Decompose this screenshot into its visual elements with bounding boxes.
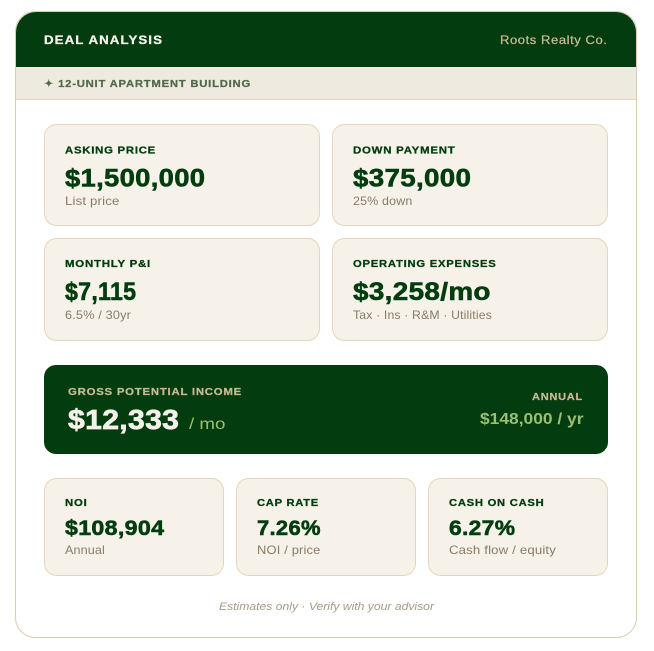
panel: down payment: $375,000 <box>353 164 471 192</box>
annual label: ANNUAL <box>532 392 583 403</box>
subtitle band <box>16 67 636 100</box>
panel: operating expenses: OPERATING EXPENSES <box>353 259 496 270</box>
panel: down payment: DOWN PAYMENT <box>353 146 456 156</box>
panel: cash on cash: 6.27% <box>449 517 515 540</box>
panel: cash on cash: CASH ON CASH <box>449 498 544 509</box>
panel: down payment: 25% down <box>353 194 412 208</box>
per month: / mo <box>189 416 226 433</box>
panel: operating expenses <box>332 238 608 340</box>
panel: NOI: NOI <box>65 498 88 509</box>
panel: down payment <box>332 124 608 226</box>
panel: NOI <box>44 478 224 576</box>
company name: Roots Realty Co. <box>500 34 608 47</box>
income label: GROSS POTENTIAL INCOME <box>68 387 242 398</box>
panel: monthly P&I: 6.5% / 30yr <box>65 308 131 322</box>
panel: asking price: $1,500,000 <box>65 164 205 192</box>
header bar <box>16 12 636 67</box>
panel: cash on cash <box>428 478 608 576</box>
panel: monthly P&I: $7,115 <box>65 278 136 306</box>
footer note: Estimates only · Verify with your advisor <box>219 601 435 613</box>
panel: operating expenses: $3,258/mo <box>353 278 491 306</box>
property type: ✦ 12-UNIT APARTMENT BUILDING <box>44 79 251 90</box>
panel: cap rate: CAP RATE <box>257 498 319 509</box>
panel: cap rate: 7.26% <box>257 517 321 540</box>
panel: NOI: $108,904 <box>65 517 164 540</box>
panel: cap rate: NOI / price <box>257 543 321 557</box>
income value: $12,333 <box>68 404 179 435</box>
panel: NOI: Annual <box>65 543 105 557</box>
panel: asking price: ASKING PRICE <box>65 146 156 156</box>
panel: operating expenses: Tax · Ins · R&M · Utilities <box>353 308 492 322</box>
title: DEAL ANALYSIS <box>44 33 163 47</box>
annual value: $148,000 / yr <box>480 411 584 428</box>
panel: cap rate <box>236 478 416 576</box>
panel: asking price: List price <box>65 194 120 208</box>
panel: cash on cash: Cash flow / equity <box>449 543 556 557</box>
panel: asking price <box>44 124 320 226</box>
panel: monthly P&I: MONTHLY P&I <box>65 259 151 270</box>
panel: gross potential income <box>44 365 608 454</box>
panel: monthly P&I <box>44 238 320 340</box>
